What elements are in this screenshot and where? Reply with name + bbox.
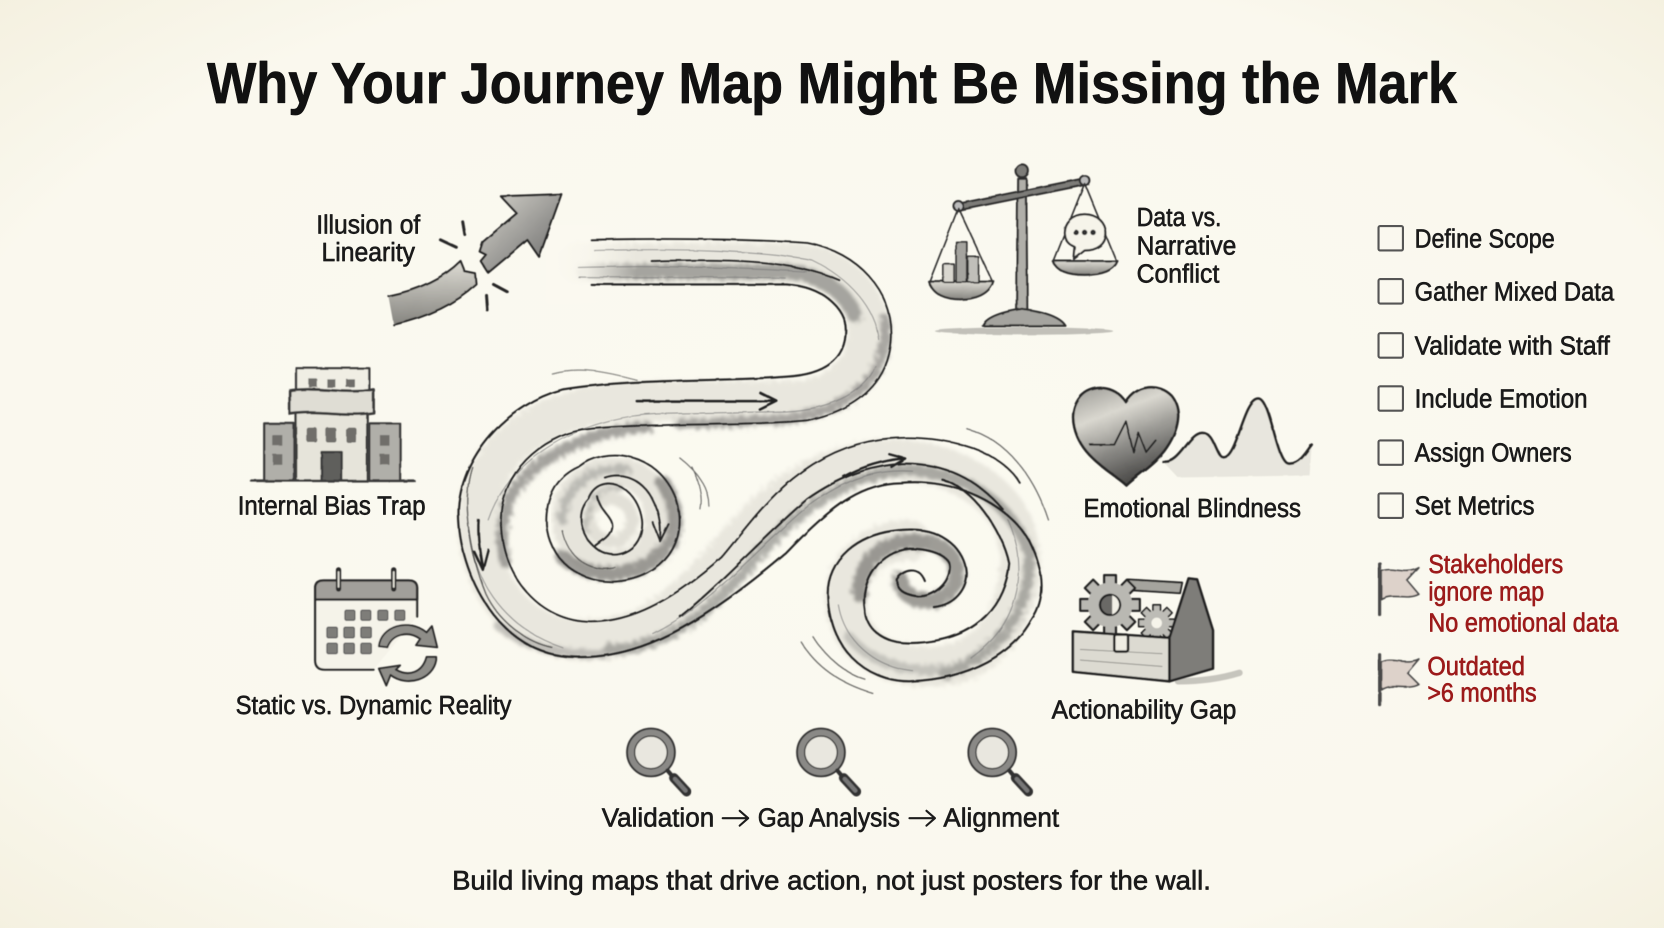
warning: stakeholders and emotional data: Stakeholders: [1428, 551, 1563, 579]
warning: outdated: Outdated: [1427, 653, 1525, 681]
process labels: Validation: [602, 805, 714, 833]
checklist item: Gather Mixed Data: Gather Mixed Data: [1415, 278, 1615, 306]
item: Emotional Blindness: [1073, 387, 1312, 523]
checklist item: Validate with Staff: Validate with Staff: [1415, 332, 1611, 360]
label: Illusion of: [316, 211, 421, 239]
checklist: [1379, 225, 1615, 521]
item: Internal Bias Trap: [238, 368, 426, 521]
checklist item: Define Scope: Define Scope: [1415, 225, 1555, 253]
label: Actionability Gap: [1052, 696, 1236, 724]
item: Actionability Gap: [1052, 575, 1240, 724]
closing message: Build living maps that drive action, not just posters for the wall.: [452, 865, 1211, 895]
process labels: Gap Analysis: [758, 805, 900, 833]
icon: magnifier 2: [797, 729, 856, 792]
icon: calendar with cycle arrows: [315, 570, 437, 686]
label: Emotional Blindness: [1084, 495, 1301, 523]
red flag warnings: [1380, 551, 1619, 707]
checklist item: Set Metrics: Set Metrics: [1415, 493, 1535, 521]
ribbon tail fade: [547, 225, 637, 304]
warning: stakeholders and emotional data: No emotional data: [1428, 609, 1619, 637]
label: [316, 211, 421, 267]
item: Illusion of Linearity: [316, 194, 561, 325]
warning: stakeholders and emotional data: ignore map: [1428, 579, 1544, 607]
ribbon shading: [479, 263, 1030, 674]
warning: outdated: [1380, 653, 1537, 707]
label: Internal Bias Trap: [238, 493, 426, 521]
icon: broken arrow: [388, 194, 561, 325]
magnifying glass process: [602, 729, 1059, 833]
small gear: [1139, 605, 1175, 641]
left inner spiral: [546, 455, 709, 582]
spiral shading: [562, 469, 675, 574]
label: Data vs.: [1137, 204, 1221, 232]
label: Linearity: [322, 239, 415, 267]
process labels: [602, 805, 1059, 833]
item: Data vs. Narrative Conflict: [929, 164, 1236, 335]
central winding journey ribbon: [458, 225, 1048, 693]
ribbon pencil edges: [458, 239, 1048, 693]
checklist item: Assign Owners: Assign Owners: [1415, 440, 1572, 468]
warning: outdated: >6 months: [1427, 679, 1537, 707]
title: Why Your Journey Map Might Be Missing the Mark: [207, 52, 1457, 116]
icon: heart with emotion wave: [1073, 387, 1312, 485]
large gear: [1080, 575, 1140, 635]
label: Conflict: [1137, 260, 1219, 288]
icon: magnifier 3: [968, 729, 1028, 792]
checklist item: Include Emotion: Include Emotion: [1415, 386, 1588, 414]
process labels: Alignment: [943, 805, 1059, 833]
spiral lines: [546, 455, 709, 582]
label: Static vs. Dynamic Reality: [236, 692, 512, 720]
label: Narrative: [1137, 233, 1236, 261]
warning: stakeholders and emotional data: [1380, 551, 1619, 637]
flow arrows: [637, 393, 777, 410]
item: Static vs. Dynamic Reality: [236, 570, 512, 720]
icon: balance scale: [929, 164, 1117, 335]
icon: magnifier 1: [627, 729, 687, 792]
icon: blindfolded building: [252, 368, 414, 481]
icon: toolbox with gears: [1073, 575, 1240, 681]
ribbon pencil streaks: [469, 250, 1019, 671]
label: [1137, 204, 1236, 288]
